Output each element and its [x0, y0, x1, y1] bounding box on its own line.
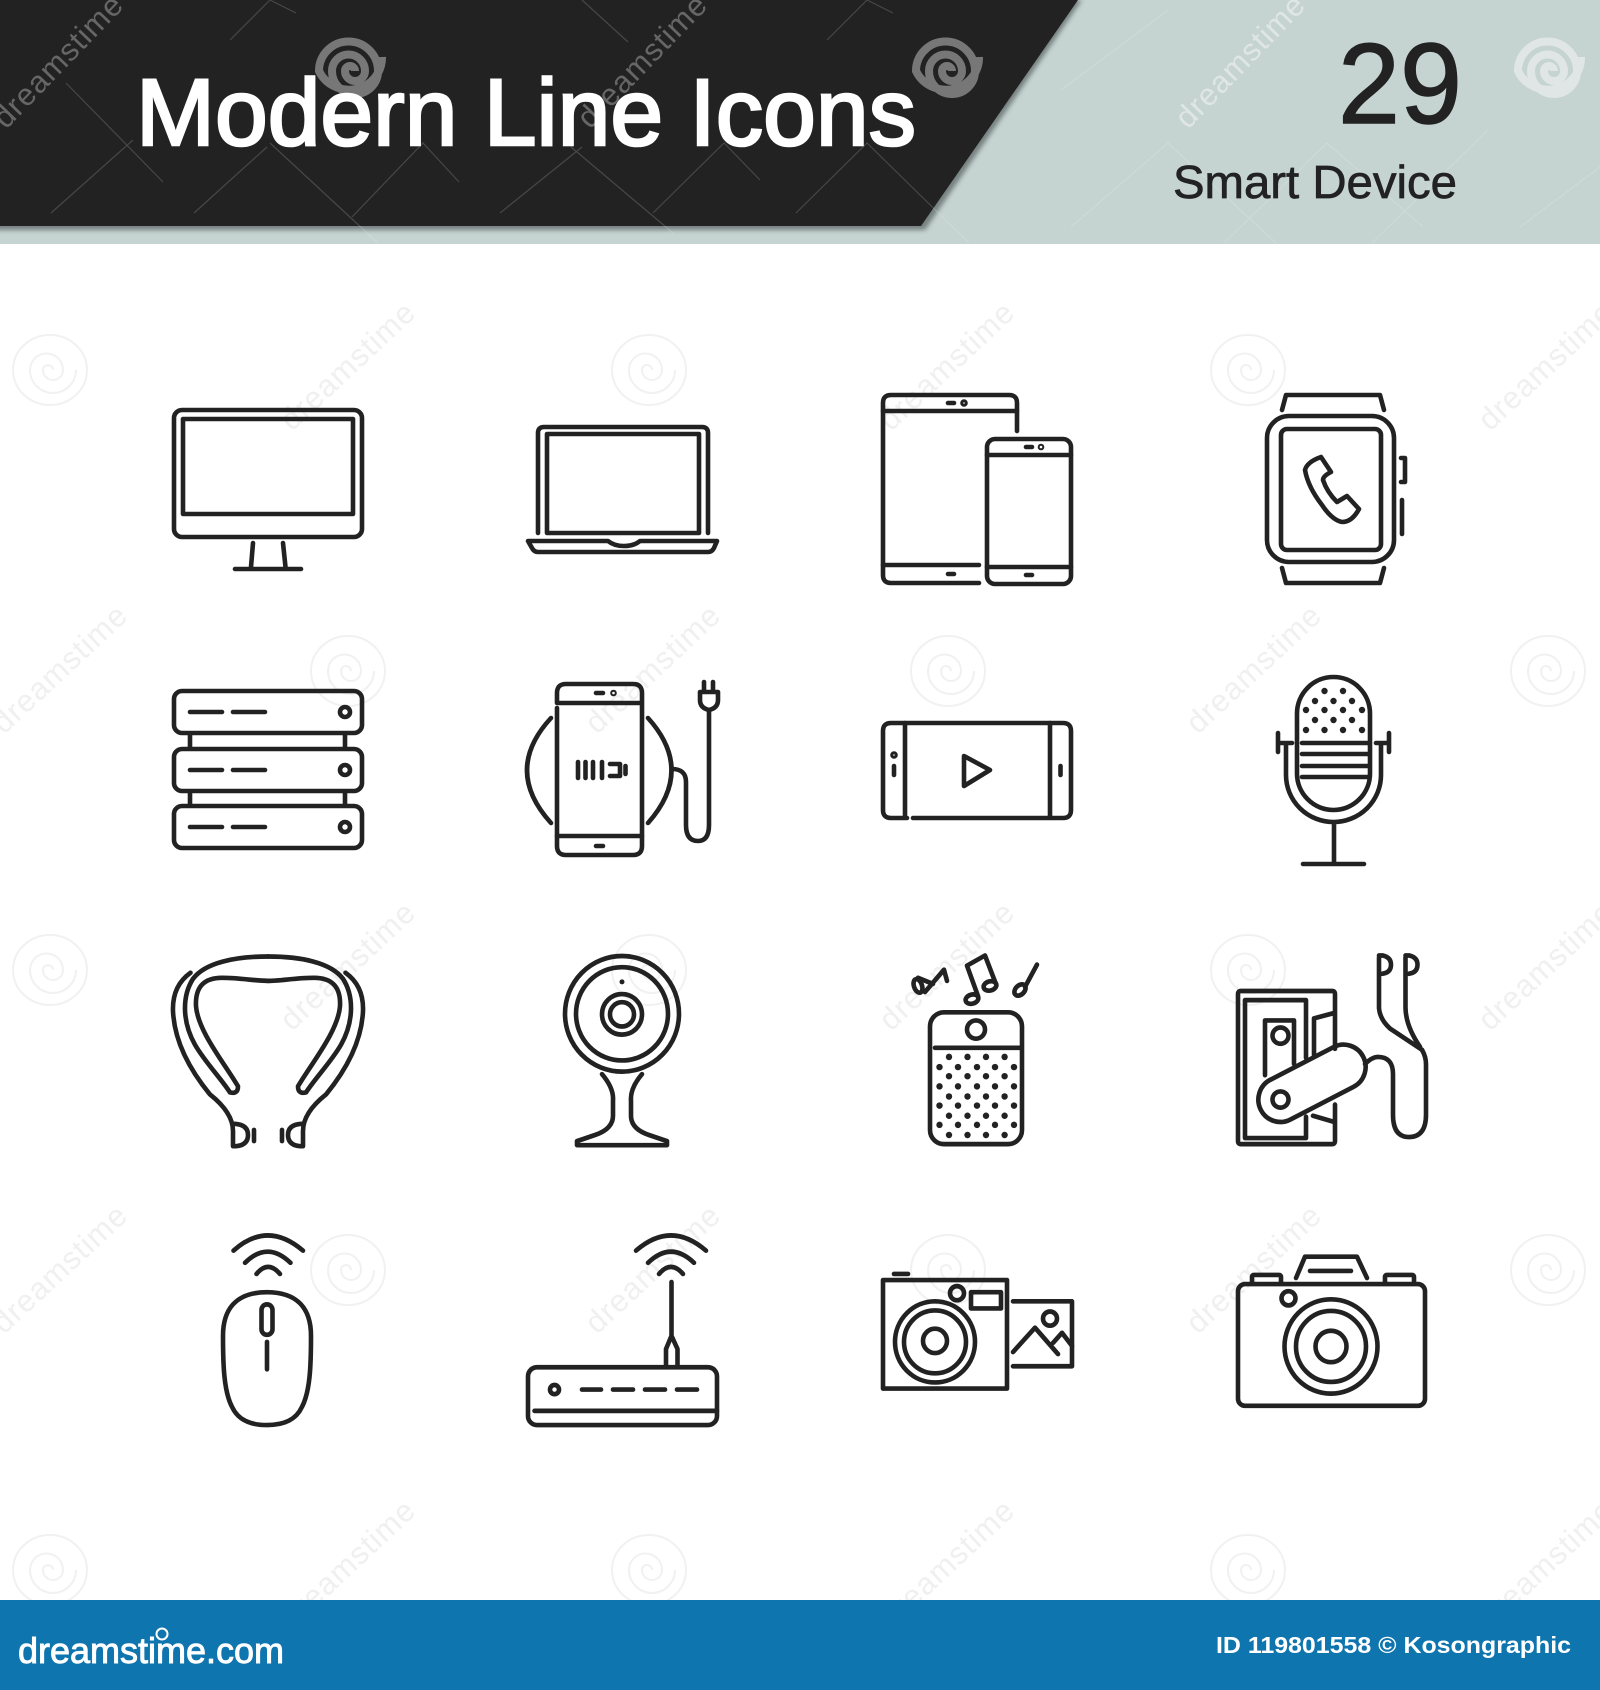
- watermark: faint swirls and diagonal text on the white area: dreamstime: [578, 597, 728, 740]
- watermark: faint swirls and diagonal text on the white area: dreamstime: [273, 1492, 423, 1635]
- watermark: faint swirls and diagonal text on the white area: dreamstime: [273, 294, 423, 437]
- watermark: faint swirls and diagonal text on the white area: dreamstime: [872, 894, 1022, 1037]
- icon: wireless phone charger: [527, 682, 718, 855]
- icon: wifi router: [528, 1235, 717, 1425]
- footer bar: [0, 1600, 1600, 1690]
- header swirl watermarks: [0, 0, 1581, 135]
- watermark: faint swirls and diagonal text on the white area: dreamstime: [872, 294, 1022, 437]
- footer credit: ID 119801558 © Kosongraphic: [1216, 1632, 1571, 1658]
- icon: cassette player with earphones: [1238, 956, 1426, 1144]
- watermark: faint swirls and diagonal text on the white area: dreamstime: [273, 894, 423, 1037]
- icon: wireless mouse: [223, 1235, 311, 1425]
- watermark: faint swirls and diagonal text on the white area: dreamstime: [578, 1197, 728, 1340]
- icon: desktop monitor: [174, 410, 362, 569]
- watermark: faint swirls and diagonal text on the white area: dreamstime: [1179, 597, 1329, 740]
- icon: studio microphone: [1278, 677, 1389, 864]
- set number: 29: [1338, 21, 1462, 148]
- icon: home webcam: [565, 956, 679, 1145]
- watermark: faint swirls and diagonal text on the white area: [0, 294, 1600, 1635]
- watermark: faint swirls and diagonal text on the white area: dreamstime: [872, 1492, 1022, 1635]
- icon: tablet and phone: [883, 395, 1071, 584]
- icon: neckband headset: [173, 957, 363, 1146]
- title: Modern Line Icons: [136, 60, 916, 166]
- footer logo: dreamstime.com: [18, 1630, 284, 1671]
- subtitle: Smart Device: [1173, 156, 1457, 208]
- header band: [0, 0, 1600, 244]
- icon: SLR camera: [1238, 1257, 1425, 1406]
- icon: smart speaker with music notes: [912, 956, 1037, 1144]
- watermark: faint swirls and diagonal text on the white area: dreamstime: [1179, 1197, 1329, 1340]
- icon: landscape video phone: [883, 723, 1071, 818]
- icon: smart watch with phone call: [1267, 395, 1405, 583]
- icon: laptop: [528, 427, 717, 552]
- icon: server rack: [174, 691, 362, 848]
- icon: compact camera with photo: [883, 1274, 1072, 1389]
